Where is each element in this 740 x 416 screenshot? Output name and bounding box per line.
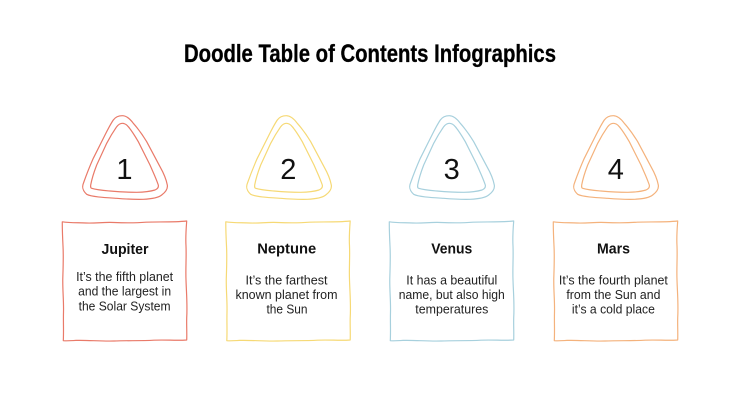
text: Jupiter description: and the largest in bbox=[78, 285, 171, 299]
number 4: 4 bbox=[608, 154, 624, 186]
column 1: Jupiter bbox=[62, 116, 187, 341]
text: Venus description: temperatures bbox=[415, 303, 488, 317]
text: Mars description: it’s a cold place bbox=[572, 303, 655, 317]
text: Jupiter description: the Solar System bbox=[79, 299, 171, 313]
text: Neptune description: the Sun bbox=[266, 303, 308, 317]
panel: Venus bbox=[389, 221, 514, 341]
text: Neptune description: known planet from bbox=[236, 288, 338, 302]
panel: Neptune bbox=[226, 221, 350, 341]
column 4: Mars bbox=[553, 116, 678, 341]
panel: Jupiter bbox=[62, 221, 187, 341]
text: Mars description: from the Sun and bbox=[566, 288, 660, 302]
text: Venus description: name, but also high bbox=[399, 288, 505, 302]
text: Neptune description bbox=[236, 273, 338, 317]
heading: Venus: Venus bbox=[431, 240, 472, 258]
icon: red doodle triangle bbox=[83, 116, 167, 199]
heading: Mars: Mars bbox=[597, 240, 630, 258]
heading: Neptune: Neptune bbox=[257, 240, 316, 258]
title: Doodle Table of Contents Infographics bbox=[184, 40, 556, 68]
number 1: 1 bbox=[116, 154, 133, 186]
number 3: 3 bbox=[444, 154, 460, 186]
text: Mars description bbox=[559, 273, 668, 317]
text: Venus description: It has a beautiful bbox=[406, 273, 497, 287]
text: Neptune description: It’s the farthest bbox=[246, 273, 328, 287]
text: Jupiter description: It’s the fifth planet bbox=[76, 270, 174, 284]
icon: orange doodle triangle bbox=[574, 116, 658, 199]
panel: Mars bbox=[553, 221, 678, 341]
number 2: 2 bbox=[280, 154, 296, 186]
icon: blue doodle triangle bbox=[410, 116, 494, 199]
column 3: Venus bbox=[389, 116, 514, 341]
icon: yellow doodle triangle bbox=[247, 116, 331, 199]
text: Mars description: It’s the fourth planet bbox=[559, 273, 668, 287]
heading: Jupiter: Jupiter bbox=[102, 241, 149, 258]
text: Venus description bbox=[399, 273, 505, 317]
text: Jupiter description bbox=[76, 270, 174, 313]
column 2: Neptune bbox=[226, 116, 350, 341]
